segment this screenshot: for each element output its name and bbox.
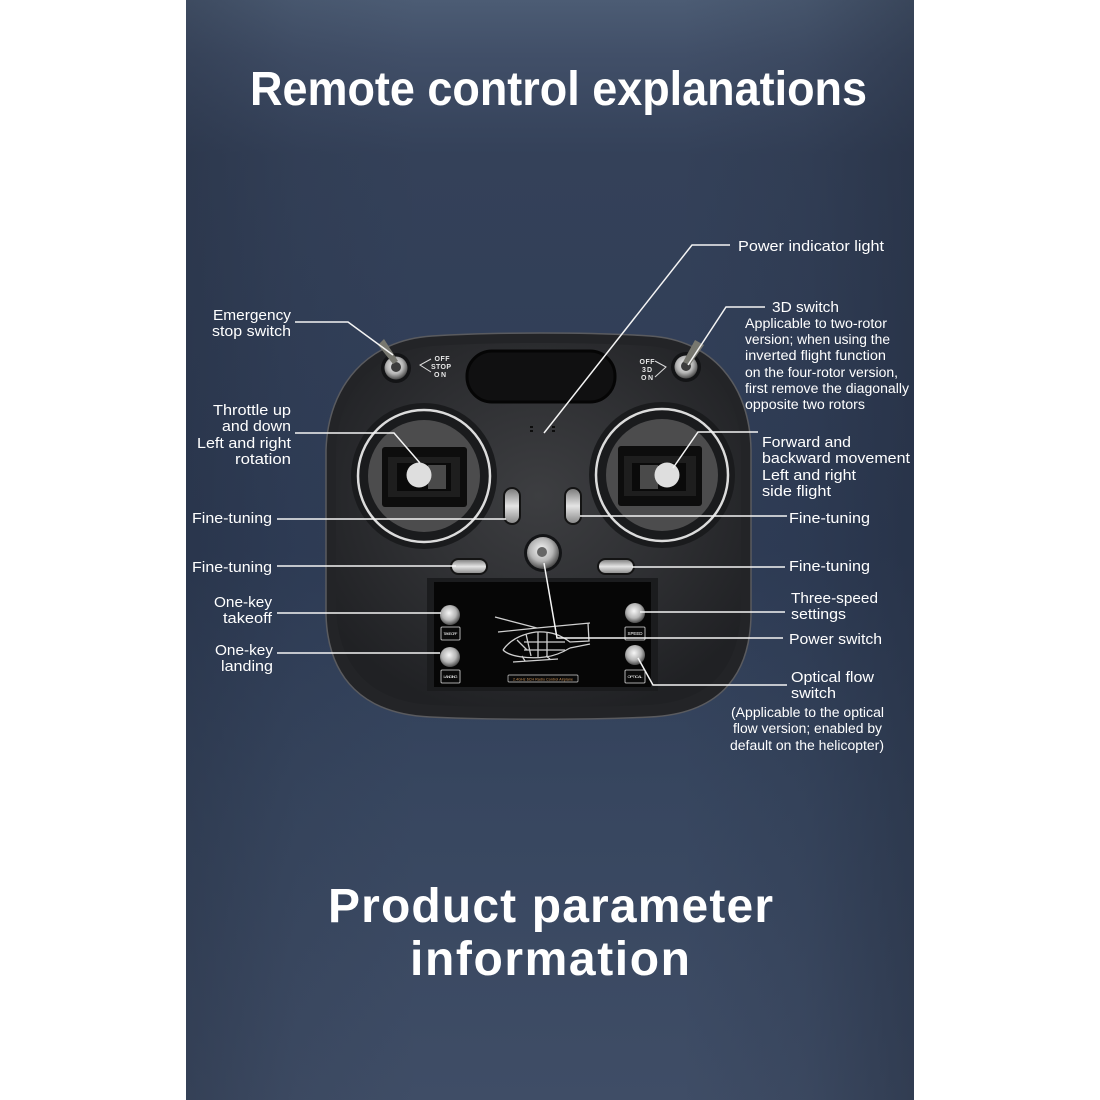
button: speed: SPEED: [628, 631, 643, 636]
label: throttle: Throttle up: [213, 402, 291, 419]
label: throttle: Left and right: [197, 435, 292, 452]
label: forward and backward: Forward and: [762, 434, 851, 451]
indicator lights: [530, 426, 555, 432]
label: forward and backward: Left and right: [762, 467, 857, 484]
right stick: [589, 402, 735, 548]
label: one-key landing: One-key: [215, 642, 273, 659]
label: one-key landing: [215, 642, 273, 675]
right toggle: 3D switch: [671, 340, 704, 382]
label: three-speed settings: [791, 590, 878, 623]
lower panel: [427, 578, 658, 691]
button: speed: [625, 603, 645, 640]
label: one-key takeoff: [214, 594, 273, 627]
heading: product parameter information: [328, 880, 773, 986]
label: three-speed settings: Three-speed: [791, 590, 878, 607]
label: throttle: and down: [222, 418, 291, 435]
button: take off: TAKE OFF: [444, 631, 458, 636]
controller body: [326, 333, 751, 719]
label: forward and backward: side flight: [762, 483, 832, 500]
switch marking: off stop on: STOP: [431, 364, 451, 371]
panel caption: [508, 675, 578, 682]
switch marking: off stop on: OFF: [434, 356, 450, 363]
title: remote control explanations: Remote control explanations: [250, 63, 867, 116]
button: optical flow: [625, 645, 645, 683]
trim: left horizontal: [451, 559, 487, 574]
left toggle: emergency stop: [378, 339, 411, 383]
power knob: [524, 534, 562, 572]
label: three-speed settings: settings: [791, 606, 846, 623]
label: 3D switch: opposite two rotors: [745, 397, 865, 412]
switch marking: off 3D on: 3D: [642, 367, 652, 374]
label: emergency stop switch: [212, 307, 292, 340]
switch marking: off 3D on: [640, 359, 666, 382]
switch marking: off 3D on: OFF: [640, 359, 655, 366]
panel: background: [186, 0, 914, 1100]
switch marking: off stop on: ON: [434, 372, 446, 379]
label: optical flow switch: default on the helicopter): [730, 738, 884, 753]
helicopter illustration: [495, 617, 590, 662]
display pill: [467, 351, 615, 402]
label: 3D switch: version; when using the: [745, 332, 890, 347]
label: one-key landing: landing: [221, 658, 273, 675]
label: forward and backward: [762, 434, 911, 500]
remote controller: [326, 333, 751, 719]
label: 3D switch: first remove the diagonally: [745, 381, 909, 396]
label: optical flow switch: switch: [791, 685, 836, 702]
label: optical flow switch: flow version; enabled by: [733, 721, 882, 736]
heading: product parameter information: Product parameter: [328, 880, 773, 933]
label: fine-tuning left lower: Fine-tuning: [192, 559, 272, 576]
trim: left vertical: [504, 488, 520, 524]
label: 3D switch: 3D switch: [772, 299, 839, 316]
label: one-key takeoff: takeoff: [223, 610, 273, 627]
switch marking: off stop on: [420, 356, 451, 379]
label: 3D switch: [745, 299, 909, 412]
label: optical flow switch: Optical flow: [791, 669, 874, 686]
heading: product parameter information: information: [410, 933, 690, 986]
label: optical flow switch: (Applicable to the optical: [731, 705, 884, 720]
switch marking: off 3D on: ON: [641, 375, 653, 382]
button: take off: [440, 605, 460, 640]
label: emergency stop switch: stop switch: [212, 323, 291, 340]
label: fine-tuning left upper: Fine-tuning: [192, 510, 272, 527]
panel caption: 2.4GHz 6CH Radio Control Airplane: [513, 678, 573, 682]
label: power indicator light: Power indicator light: [738, 238, 885, 255]
trim: right vertical: [565, 488, 581, 524]
trim: right horizontal: [598, 559, 634, 574]
label: fine-tuning right lower: Fine-tuning: [789, 558, 870, 575]
button: landing: [440, 647, 460, 683]
left stick: [351, 403, 497, 549]
label: 3D switch: Applicable to two-rotor: [745, 316, 888, 331]
label: 3D switch: on the four-rotor version,: [745, 365, 898, 380]
button: landing: LANDING: [444, 674, 458, 679]
label: emergency stop switch: Emergency: [213, 307, 292, 324]
label: forward and backward: backward movement: [762, 450, 911, 467]
button: optical flow: OPTICAL: [628, 674, 643, 679]
leader lines: [277, 245, 787, 685]
label: optical flow switch: [730, 669, 884, 753]
label: power switch: Power switch: [789, 631, 882, 648]
label: 3D switch: inverted flight function: [745, 348, 886, 363]
label: fine-tuning right upper: Fine-tuning: [789, 510, 870, 527]
label: throttle: [197, 402, 292, 468]
label: one-key takeoff: One-key: [214, 594, 272, 611]
label: throttle: rotation: [235, 451, 291, 468]
